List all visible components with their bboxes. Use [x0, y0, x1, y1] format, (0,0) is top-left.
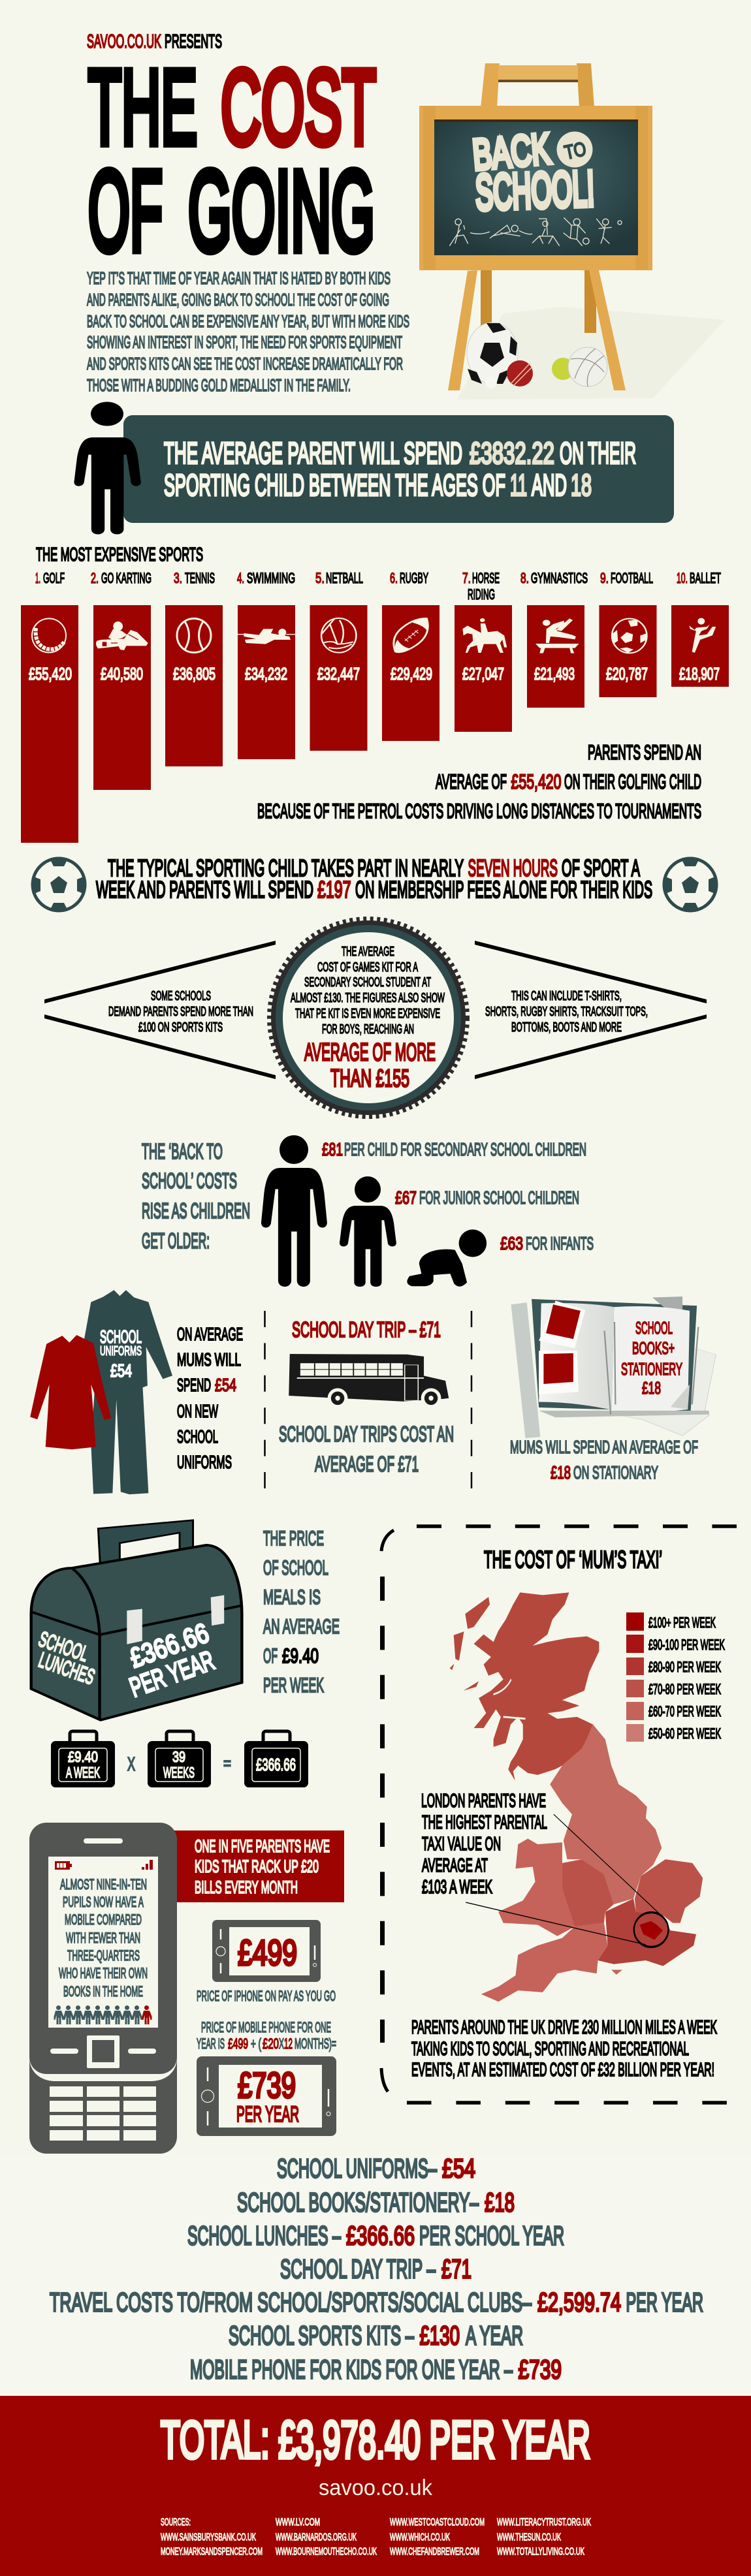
easel with chalkboard and balls: TO: [562, 138, 588, 164]
text: uniforms spend: £54: [215, 1375, 236, 1395]
icon: horse and rider: [462, 618, 507, 653]
icon: ballerina: [689, 618, 716, 653]
banner: average spend: ON THEIR: [560, 436, 636, 470]
icon: lunch box: £366.66: [125, 1617, 213, 1673]
text: typical sporting child: £197: [317, 876, 351, 903]
sport rank labels: 8.: [520, 570, 529, 586]
sources: WWW.WESTCOASTCLOUD.COM: [390, 2517, 485, 2528]
sport icons: [32, 618, 716, 653]
text: typical sporting child: SEVEN HOURS: [468, 855, 558, 881]
text: uniforms spend: ON AVERAGE: [177, 1324, 243, 1344]
icon: school uniforms: SCHOOL: [100, 1327, 142, 1347]
icon: mobile phone: [29, 1823, 177, 2154]
text: typical sporting child: OF SPORT A: [562, 855, 640, 881]
text: school meals: MEALS IS: [263, 1585, 321, 1609]
panel: books and stationery: [510, 1296, 716, 1483]
panel: left diamond: £100 ON SPORTS KITS: [138, 1020, 223, 1035]
text: age costs: FOR JUNIOR SCHOOL CHILDREN: [419, 1187, 579, 1208]
text: age costs: £63: [500, 1233, 523, 1253]
text: school meals: OF SCHOOL: [263, 1556, 328, 1579]
bar chart: sport costs: £36,805: [173, 664, 216, 683]
banner: average spend: 11: [510, 468, 527, 502]
cost summary list: £130: [419, 2320, 460, 2350]
text: nine in ten pupils: THREE-QUARTERS: [67, 1947, 140, 1964]
icon: tennis ball: [177, 619, 211, 653]
panel: one in five parents: [174, 1830, 344, 1902]
panel: one in five parents: ONE IN FIVE PARENTS HAVE: [195, 1836, 330, 1856]
icon: annual phone cost: £739: [238, 2065, 296, 2105]
sport rank labels: [35, 570, 721, 603]
text: typical sporting child: [96, 855, 652, 903]
sport rank labels: 1.: [35, 570, 40, 586]
panel: games kit badge: COST OF GAMES KIT FOR A: [317, 960, 418, 975]
text: age costs: FOR INFANTS: [526, 1233, 594, 1253]
panel: school day trip: AVERAGE OF £71: [315, 1453, 419, 1477]
icon: weeks case: [148, 1731, 211, 1787]
callout: golf costs: £55,420: [511, 770, 562, 793]
icon: gymnast on pommel: [535, 618, 579, 653]
text: nine in ten pupils: WHO HAVE THEIR OWN: [59, 1965, 148, 1981]
text: mobile sum: 12: [284, 2035, 293, 2052]
bar chart: sport costs: £40,580: [101, 664, 143, 683]
callout: london parents: LONDON PARENTS HAVE: [421, 1791, 546, 1812]
panel: books and stationery: ON STATIONARY: [573, 1462, 658, 1483]
panel: games kit badge: THE AVERAGE: [342, 945, 394, 959]
bar chart: sport costs: £27,047: [462, 664, 504, 683]
panel: one in five parents: BILLS EVERY MONTH: [195, 1877, 298, 1897]
icon: iphone price: £499: [238, 1932, 297, 1973]
cost summary list: £18: [485, 2187, 515, 2217]
icon: school uniforms: UNIFORMS: [100, 1344, 142, 1359]
icon: junior school child: [340, 1176, 396, 1287]
cost summary list: SCHOOL SPORTS KITS –: [229, 2320, 414, 2350]
text: costs rise with age: [142, 1140, 250, 1253]
callout: london parents: [421, 1791, 547, 1898]
bar chart: sport costs: £20,787: [606, 664, 648, 683]
sport rank labels: 4.: [237, 570, 244, 586]
sport rank labels: SWIMMING: [247, 570, 295, 586]
panel: games kit badge: THAN £155: [330, 1065, 409, 1093]
panel: books and stationery: £18: [642, 1378, 661, 1398]
cost summary list: PER SCHOOL YEAR: [419, 2221, 564, 2251]
icon: netball: [321, 618, 356, 653]
brand: savoo.co.uk: [319, 2475, 433, 2500]
text: uniforms spend: UNIFORMS: [177, 1452, 232, 1472]
text: school meals: AN AVERAGE: [263, 1614, 340, 1638]
sources: WWW.SAINSBURYSBANK.CO.UK: [161, 2532, 256, 2543]
panel: games kit badge: [270, 919, 467, 1116]
text: nine in ten pupils: BOOKS IN THE HOME: [63, 1983, 143, 2000]
text: age costs: £81: [322, 1139, 343, 1159]
icon: lunch box: LUNCHES: [36, 1648, 98, 1689]
text: mobile sum: £20: [263, 2035, 279, 2052]
sources: WWW.TOTALLYLIVING.CO.UK: [497, 2546, 584, 2558]
cost summary list: £54: [442, 2153, 475, 2183]
cost summary list: £2,599.74: [537, 2287, 621, 2317]
text: mobile sum: [197, 2019, 336, 2052]
banner: average spend: 18: [571, 468, 592, 502]
icon: school uniforms: £54: [110, 1360, 132, 1381]
icon: right football: [664, 858, 716, 911]
icon: weeks case: 39: [172, 1748, 185, 1765]
intro paragraph: THOSE WITH A BUDDING GOLD MEDALLIST IN THE FAMILY.: [87, 377, 351, 395]
panel: school day trip: SCHOOL DAY TRIP – £71: [292, 1318, 441, 1342]
sport rank labels: HORSE: [472, 570, 500, 586]
easel with chalkboard and balls: SCHOOL!: [475, 161, 595, 221]
easel with chalkboard and balls: [419, 63, 725, 400]
sources: WWW.LV.COM: [276, 2517, 320, 2528]
panel: games kit badge: AVERAGE OF MORE: [304, 1039, 436, 1067]
sport rank labels: TENNIS: [185, 570, 215, 586]
icon: annual phone cost: [197, 2056, 336, 2136]
equation: lunch cost: =: [223, 1753, 231, 1773]
text: nine in ten pupils: ALMOST NINE-IN-TEN: [60, 1876, 147, 1893]
panel: left diamond: SOME SCHOOLS: [151, 989, 211, 1003]
easel with chalkboard and balls: BACK: [471, 124, 552, 179]
intro paragraph: BACK TO SCHOOL CAN BE EXPENSIVE ANY YEAR, BUT WITH MORE KIDS: [87, 313, 409, 331]
footer band: [0, 2396, 751, 2576]
cost summary list: A YEAR: [466, 2320, 523, 2350]
bar chart: sport costs: £21,493: [534, 664, 575, 683]
panel: school day trip: [279, 1318, 454, 1477]
text: nine in ten pupils: PUPILS NOW HAVE A: [63, 1894, 144, 1910]
banner: average spend: £3832.22: [470, 436, 554, 470]
text: nine in ten pupils: [59, 1876, 148, 2000]
text: school meals: £9.40: [282, 1644, 319, 1667]
sources: MONEY.MARKSANDSPENCER.COM: [161, 2546, 263, 2558]
sources: WWW.THESUN.CO.UK: [497, 2532, 561, 2543]
icon: total case: £366.66: [256, 1756, 296, 1774]
icon: weekly cost case: £9.40: [68, 1748, 98, 1765]
panel: books and stationery: £18: [551, 1462, 571, 1483]
text: taxi summary: [411, 2017, 717, 2081]
icon: go kart: [96, 621, 148, 650]
title: [88, 48, 376, 274]
text: costs rise with age: SCHOOL’ COSTS: [142, 1169, 237, 1193]
sources: WWW.CHEFANDBREWER.COM: [390, 2546, 479, 2558]
sport rank labels: 10.: [677, 570, 688, 586]
text: school meals: OF: [263, 1644, 278, 1667]
callout: golf costs: [257, 740, 701, 823]
text: mobile sum: MONTHS)=: [295, 2035, 336, 2052]
cost summary list: SCHOOL BOOKS/STATIONERY–: [237, 2187, 479, 2217]
text: costs rise with age: GET OLDER:: [142, 1229, 210, 1253]
text: mobile sum: YEAR IS: [197, 2035, 225, 2052]
icon: football: [612, 619, 647, 653]
text: school meals: THE PRICE: [263, 1526, 324, 1550]
sport rank labels: 7.: [462, 570, 471, 586]
icon: school uniforms: [30, 1290, 172, 1494]
panel: left diamond: [44, 941, 276, 1079]
sport rank labels: NETBALL: [326, 570, 363, 586]
sport rank labels: RIDING: [468, 586, 495, 603]
text: mobile sum: X: [279, 2035, 284, 2052]
icon: golf ball: [32, 619, 66, 653]
text: school meals: PER WEEK: [263, 1673, 324, 1697]
icon: swimmer: [234, 629, 298, 644]
sport rank labels: 2.: [91, 570, 99, 586]
icon: crawling infant: [407, 1229, 487, 1287]
callout: golf costs: AVERAGE OF: [436, 770, 507, 793]
banner: average spend: THE AVERAGE PARENT WILL SPEND: [164, 436, 462, 470]
panel: right diamond: BOTTOMS, BOOTS AND MORE: [511, 1020, 622, 1035]
banner: average spend: [123, 415, 674, 523]
cost summary list: SCHOOL DAY TRIP –: [280, 2254, 436, 2284]
text: nine in ten pupils: WITH FEWER THAN: [66, 1930, 140, 1946]
bar chart: sport costs: £18,907: [679, 664, 720, 683]
text: age costs: £67: [395, 1187, 417, 1208]
cost summary list: MOBILE PHONE FOR KIDS FOR ONE YEAR –: [190, 2354, 513, 2384]
text: mobile sum: PRICE OF MOBILE PHONE FOR ONE: [201, 2019, 331, 2035]
cost summary list: £366.66: [346, 2221, 415, 2251]
callout: london parents: AVERAGE AT: [422, 1855, 488, 1876]
panel: games kit badge: THAT PE KIT IS EVEN MORE EXPENSIVE: [295, 1007, 440, 1021]
sport rank labels: FOOTBALL: [611, 570, 653, 586]
title: OF: [88, 147, 163, 274]
panel: mum's taxi frame and map: [381, 1526, 737, 2103]
sources: WWW.BARNARDOS.ORG.UK: [276, 2532, 357, 2543]
bar chart: sport costs: £32,447: [317, 664, 360, 683]
sport rank labels: 9.: [600, 570, 609, 586]
sport rank labels: 3.: [174, 570, 182, 586]
uk map: [450, 1592, 703, 2002]
text: typical sporting child: THE TYPICAL SPORTING CHILD TAKES PART IN NEARLY: [108, 855, 464, 881]
sources: WWW.BOURNEMOUTHECHO.CO.UK: [276, 2546, 377, 2558]
text: iphone caption: PRICE OF IPHONE ON PAY AS YOU GO: [197, 1988, 336, 2004]
panel: school day trip: SCHOOL DAY TRIPS COST AN: [279, 1422, 454, 1447]
equation: lunch cost: X: [127, 1754, 135, 1775]
presenter line: PRESENTS: [165, 31, 222, 52]
text: mobile sum: £499: [228, 2035, 248, 2052]
intro paragraph: [87, 270, 409, 395]
icon: school bus: [289, 1354, 449, 1408]
icon: lunch box: PER YEAR: [125, 1644, 218, 1703]
text: costs rise with age: THE ‘BACK TO: [142, 1140, 223, 1164]
cost summary list: [0, 2153, 751, 2396]
callout: london parents: TAXI VALUE ON: [422, 1834, 501, 1855]
cost summary list: SCHOOL UNIFORMS–: [277, 2153, 437, 2183]
cost summary list: £71: [441, 2254, 471, 2284]
text: uniforms spend: MUMS WILL: [177, 1349, 241, 1370]
icon: secondary school child: [261, 1135, 327, 1287]
panel: books and stationery: STATIONERY: [621, 1359, 682, 1379]
icon: weekly cost case: [51, 1731, 115, 1787]
panel: one in five parents: KIDS THAT RACK UP £20: [195, 1857, 319, 1876]
intro paragraph: YEP IT’S THAT TIME OF YEAR AGAIN THAT IS HATED BY BOTH KIDS: [87, 270, 391, 288]
intro paragraph: AND SPORTS KITS CAN SEE THE COST INCREASE DRAMATICALLY FOR: [87, 355, 403, 373]
sport rank labels: GYMNASTICS: [531, 570, 588, 586]
equation: lunch cost: [51, 1731, 308, 1787]
sources: SOURCES:: [161, 2517, 191, 2528]
icon: lunch box: SCHOOL: [36, 1627, 92, 1666]
icon: annual phone cost: PER YEAR: [236, 2102, 299, 2127]
icon: parent figure: [74, 402, 141, 534]
panel: books and stationery: SCHOOL: [635, 1318, 673, 1338]
sources: [161, 2517, 591, 2558]
icon: total case: [244, 1731, 308, 1787]
title: THE: [88, 48, 197, 166]
sources: WWW.WHICH.CO.UK: [390, 2532, 450, 2543]
panel: right diamond: THIS CAN INCLUDE T-SHIRTS,: [511, 989, 622, 1003]
sport rank labels: 5.: [315, 570, 325, 586]
bar chart: sport costs: £34,232: [245, 664, 287, 683]
text: nine in ten pupils: MOBILE COMPARED: [65, 1911, 142, 1928]
map legend: [626, 1612, 725, 1742]
sport rank labels: GOLF: [43, 570, 65, 586]
text: uniforms spend: SCHOOL: [177, 1426, 218, 1447]
title: COST: [221, 48, 376, 166]
text: uniforms spend: SPEND: [177, 1375, 211, 1395]
panel: right diamond: [475, 941, 707, 1079]
icon: iphone price: [212, 1920, 321, 1982]
callout: london parents: £103 A WEEK: [422, 1877, 492, 1898]
bar chart: sport costs: [21, 605, 729, 843]
banner: average spend: AND: [532, 468, 567, 502]
text: typical sporting child: WEEK AND PARENTS WILL SPEND: [96, 876, 313, 903]
heading: most expensive sports: THE MOST EXPENSIVE SPORTS: [36, 544, 203, 565]
icon: ten pupils: [54, 2005, 152, 2024]
sport rank labels: 6.: [390, 570, 398, 586]
text: school meals: [263, 1526, 340, 1697]
icon: lunch box: [31, 1520, 242, 1720]
text: uniforms spend: [177, 1324, 243, 1472]
presenter line: SAVOO.CO.UK: [87, 31, 161, 52]
panel: books and stationery: BOOKS+: [632, 1338, 675, 1358]
sport rank labels: RUGBY: [400, 570, 428, 586]
sport rank labels: GO KARTING: [101, 570, 152, 586]
cost summary list: £739: [519, 2354, 562, 2384]
icon: weekly cost case: A WEEK: [66, 1764, 100, 1781]
intro paragraph: SHOWING AN INTEREST IN SPORT, THE NEED FOR SPORTS EQUIPMENT: [87, 334, 402, 352]
panel: games kit badge: FOR BOYS, REACHING AN: [322, 1022, 414, 1037]
text: GOING: [188, 147, 375, 274]
text: mobile sum: + (: [251, 2035, 261, 2052]
panel: games kit badge: ALMOST £130. THE FIGURES ALSO SHOW: [291, 991, 445, 1005]
bar chart: sport costs: £55,420: [29, 664, 72, 683]
cost summary list: SCHOOL LUNCHES –: [187, 2221, 341, 2251]
icon: weeks case: WEEKS: [163, 1764, 195, 1781]
sport rank labels: BALLET: [690, 570, 721, 586]
callout: london parents: THE HIGHEST PARENTAL: [422, 1812, 547, 1833]
icon: left football: [33, 858, 85, 911]
text: costs rise with age: RISE AS CHILDREN: [142, 1199, 250, 1223]
icon: battery: [55, 1861, 72, 1870]
intro paragraph: AND PARENTS ALIKE, GOING BACK TO SCHOOL! THE COST OF GOING: [87, 291, 389, 309]
sources: WWW.LITERACYTRUST.ORG.UK: [497, 2517, 591, 2528]
panel: games kit badge: SECONDARY SCHOOL STUDENT AT: [304, 975, 431, 990]
text: uniforms spend: ON NEW: [177, 1401, 218, 1421]
panel: left diamond: DEMAND PARENTS SPEND MORE THAN: [108, 1005, 253, 1019]
icon: signal: [142, 1860, 153, 1870]
bar chart: sport costs: £29,429: [391, 664, 432, 683]
icon: rugby ball: [394, 618, 428, 652]
text: age costs: [322, 1139, 594, 1253]
